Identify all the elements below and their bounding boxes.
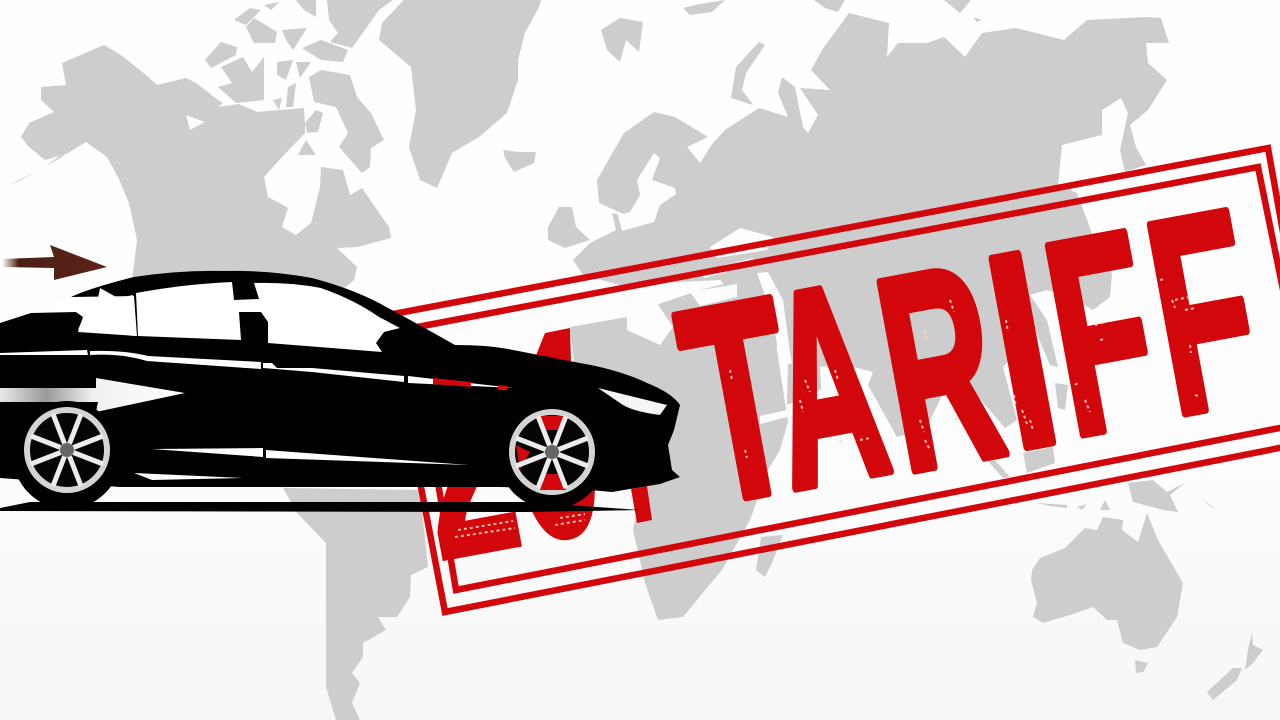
map: Africa	[570, 275, 788, 620]
map: South America	[283, 488, 428, 720]
stamp word TARIFF: A	[745, 223, 906, 547]
car: body silhouette	[0, 271, 680, 492]
stamp word TARIFF	[661, 151, 1278, 562]
stamp inner border	[412, 167, 1280, 590]
map: Tasmania	[1135, 660, 1148, 673]
map: Arctic archipelagos	[601, 0, 982, 105]
car: front wheel	[498, 401, 606, 509]
map: Greenland	[379, 0, 541, 188]
stamp word TARIFF: R	[858, 206, 1021, 531]
car: rear quarter window	[54, 288, 135, 336]
car: main windows	[136, 282, 400, 352]
map: Iceland	[503, 150, 536, 172]
car: rear wheel	[13, 401, 121, 509]
map: New Zealand	[1207, 632, 1263, 700]
arrow: white arrow on car door	[0, 378, 185, 412]
stamp digit fragments	[535, 328, 652, 523]
ground shadow line	[0, 502, 640, 512]
car: headlight	[598, 388, 667, 415]
stamp word TARIFF: F	[1026, 172, 1176, 494]
stamp partly hidden digits: 2	[392, 295, 538, 619]
map: water cut-outs	[186, 115, 838, 424]
stamp outer border	[388, 148, 1280, 612]
map: Australia	[1031, 513, 1183, 650]
car: body highlight strips	[0, 350, 513, 480]
map: Eurasia	[573, 13, 1169, 437]
stamp word TARIFF: T	[661, 240, 818, 562]
stamp ink speckle	[455, 279, 1199, 537]
car: red stamp seen through strip	[433, 378, 507, 390]
map: Arctic islands	[205, 0, 393, 173]
car	[0, 271, 680, 512]
stamp partly hidden digits	[437, 487, 595, 562]
arrow: brown motion arrow	[2, 245, 107, 280]
map: North America	[5, 45, 391, 488]
map: Southeast Asia islands	[987, 383, 1217, 512]
stamp word TARIFF: I	[969, 195, 1076, 508]
map: Madagascar	[756, 535, 783, 577]
stamp word TARIFF: F	[1128, 151, 1278, 473]
tariff stamp	[388, 148, 1280, 619]
stamp partly hidden digits: 0	[480, 280, 623, 602]
map: British Isles	[548, 207, 590, 248]
